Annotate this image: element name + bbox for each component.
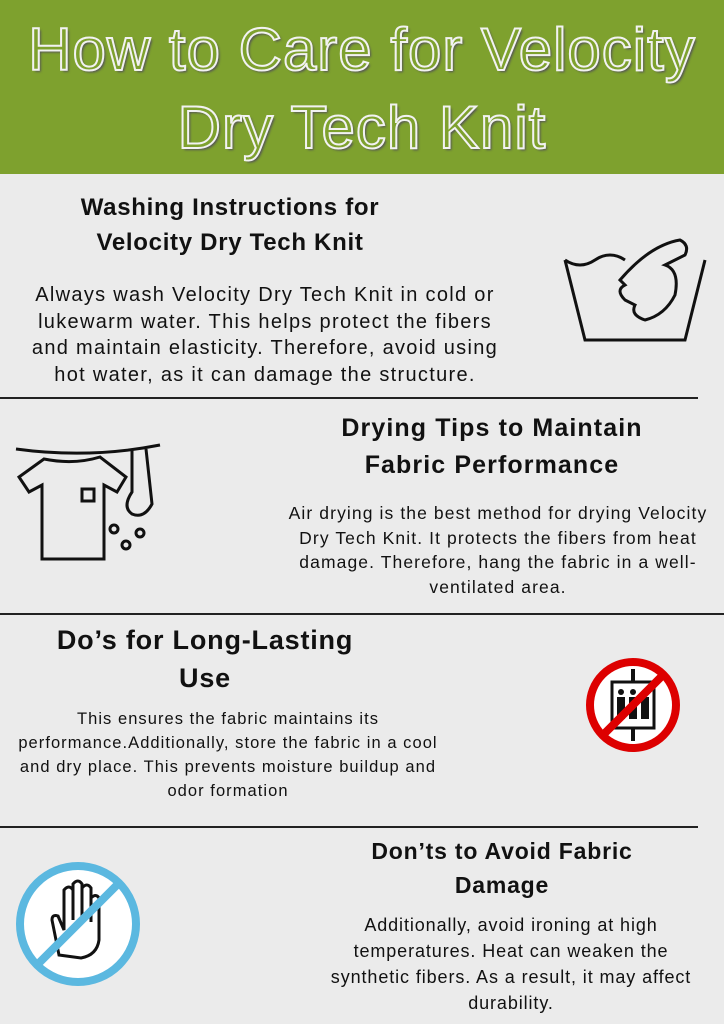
icon: no hand (16, 862, 140, 986)
text: drying: Air drying is the best method for drying Velocity (289, 503, 707, 523)
title banner (0, 0, 724, 174)
text: washing (32, 284, 498, 386)
panel: dos (18, 625, 680, 800)
heading: washing: Velocity Dry Tech Knit (96, 229, 364, 256)
text: dos (18, 710, 438, 800)
text: washing: hot water, as it can damage the structure. (54, 364, 476, 386)
text: drying: Dry Tech Knit. It protects the fibers from heat (299, 528, 697, 548)
icon: hand wash (564, 238, 706, 342)
heading: washing: Washing Instructions for (81, 194, 379, 221)
heading: dos: Use (179, 663, 231, 693)
text: dos: and dry place. This prevents moisture buildup and (20, 758, 436, 776)
text: washing: and maintain elasticity. Therefore, avoid using (32, 337, 498, 359)
heading: dos: Do’s for Long-Lasting (57, 625, 353, 655)
title (28, 16, 698, 164)
icon: clothesline (16, 444, 160, 560)
heading: donts: Damage (455, 872, 549, 898)
text: donts: Additionally, avoid ironing at high (364, 915, 658, 935)
text: donts: temperatures. Heat can weaken the (354, 941, 668, 961)
text: drying (288, 503, 707, 596)
text: donts: synthetic fibers. As a result, it may affect (331, 967, 691, 987)
text: drying: ventilated area. (429, 576, 567, 596)
title: Dry Tech Knit (178, 94, 546, 161)
panel: drying (16, 414, 707, 596)
text: washing: Always wash Velocity Dry Tech Knit in cold or (35, 284, 495, 306)
heading: drying: Fabric Performance (365, 451, 619, 479)
text: dos: performance.Additionally, store the fabric in a cool (18, 734, 438, 752)
title: How to Care for Velocity (28, 16, 696, 83)
icon: no elevator (586, 658, 680, 752)
text: dos: This ensures the fabric maintains its (77, 710, 379, 728)
text: washing: lukewarm water. This helps protect the fibers (38, 310, 492, 332)
text: donts (331, 915, 691, 1013)
panel: washing (32, 194, 706, 386)
heading: donts: Don’ts to Avoid Fabric (371, 838, 633, 864)
heading: drying: Drying Tips to Maintain (341, 414, 643, 442)
heading: donts (371, 838, 633, 898)
text: donts: durability. (468, 993, 554, 1013)
heading: dos (57, 625, 353, 693)
text: drying: damage. Therefore, hang the fabric in a well- (299, 552, 697, 572)
panel: donts (16, 838, 691, 1013)
text: dos: odor formation (167, 782, 289, 800)
heading: drying (341, 414, 643, 479)
heading: washing (80, 194, 379, 256)
